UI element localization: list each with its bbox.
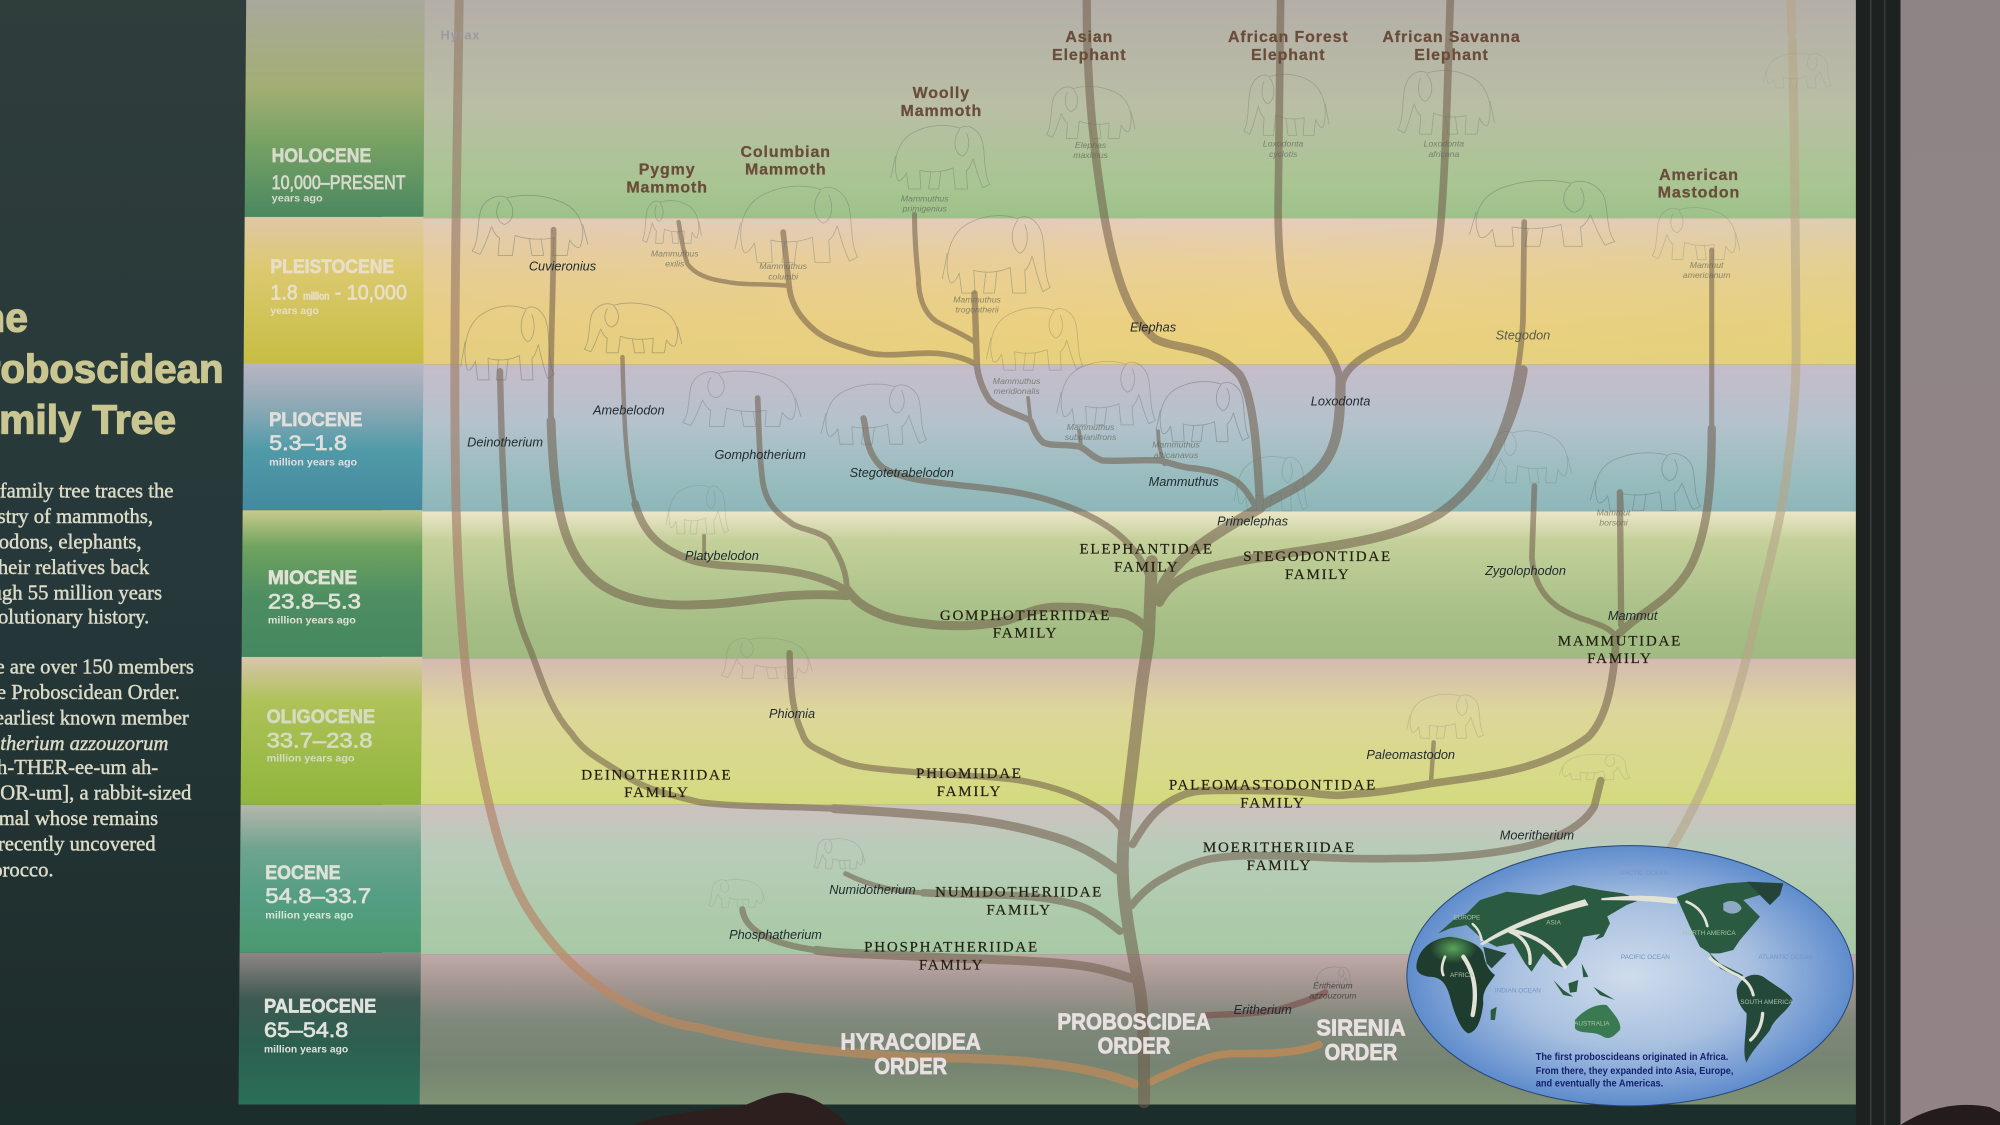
common name labels: Elephant <box>1414 47 1489 64</box>
Phiomiidae branch <box>790 653 1122 830</box>
family labels: FAMILY <box>919 957 984 973</box>
species labels: Loxodonta <box>1424 139 1464 149</box>
map place labels: ATLANTIC OCEAN <box>1758 954 1813 961</box>
genus labels: Amebelodon <box>592 403 665 418</box>
family labels: STEGODONTIDAE <box>1243 549 1392 565</box>
genus labels: Cuvieronius <box>529 258 597 273</box>
genus labels: Gomphotherium <box>714 447 806 462</box>
title <box>0 295 223 443</box>
species labels: cyclotis <box>1269 149 1298 159</box>
species labels: Mammuthus <box>759 261 807 271</box>
family labels: PALEOMASTODONTIDAE <box>1169 778 1377 794</box>
order labels <box>841 1008 1406 1079</box>
Moeritheriidae branch <box>1131 781 1601 906</box>
epoch label: Oligocene <box>267 707 375 764</box>
genus labels: Mammuthus <box>1149 474 1219 489</box>
species labels: Loxodonta <box>1263 139 1303 149</box>
map place labels: INDIAN OCEAN <box>1495 987 1541 994</box>
family labels: NUMIDOTHERIIDAE <box>935 885 1103 901</box>
epoch label: Miocene: MIOCENE <box>268 568 357 589</box>
Eritherium branch <box>1207 992 1325 1015</box>
species labels: Mammut <box>1690 260 1723 270</box>
species labels: exilis <box>665 259 685 269</box>
Amebelodon branch thick part <box>635 504 844 589</box>
genus labels: Paleomastodon <box>1366 747 1455 762</box>
order labels: ORDER <box>1325 1039 1398 1065</box>
species labels: americanum <box>1683 270 1730 280</box>
species labels: Mammuthus <box>953 294 1001 304</box>
epoch label: Oligocene: million years ago <box>267 753 355 764</box>
American Mastodon branch thick part <box>1617 429 1712 635</box>
species labels: Mammuthus <box>1152 440 1200 450</box>
map place labels: AFRICA <box>1450 972 1474 979</box>
epoch label: Eocene: EOCENE <box>265 863 341 884</box>
genus labels: Deinotherium <box>467 434 543 449</box>
map place labels: EUROPE <box>1453 915 1480 922</box>
species labels: africanavus <box>1154 450 1199 460</box>
wall behind the display <box>1888 0 2000 1125</box>
family labels: FAMILY <box>1247 858 1312 874</box>
common name labels: Elephant <box>1052 47 1127 64</box>
map caption: and eventually the Americas. <box>1536 1079 1663 1090</box>
Woolly Mammoth branch <box>915 214 974 342</box>
epoch label: Pleistocene: PLEISTOCENE <box>270 257 394 278</box>
Phosphatheriidae branch <box>742 909 1131 978</box>
Elephas: Asian Elephant <box>1087 0 1260 508</box>
trunk <box>1123 561 1152 1102</box>
common name labels: Elephant <box>1251 47 1325 64</box>
migration arrows <box>1442 896 1763 1040</box>
Phosphatheriidae branch thick part <box>816 950 1131 978</box>
outer order branches: Hyracoidea and Sirenia lines <box>455 0 1796 1084</box>
epoch label: Miocene: million years ago <box>268 616 356 627</box>
family labels: DEINOTHERIIDAE <box>581 767 732 783</box>
common name labels: Sea Cow <box>1764 29 1826 44</box>
species labels: Mammuthus <box>651 248 699 258</box>
Gomphotherium branch <box>758 398 847 596</box>
foreground rock silhouette <box>631 1093 848 1125</box>
epoch label: Pliocene <box>269 410 362 469</box>
genus labels: Elephas <box>1130 320 1177 335</box>
common name labels: American <box>1659 167 1739 184</box>
intro text block <box>0 480 194 881</box>
epoch label: Pliocene: PLIOCENE <box>269 410 362 431</box>
map place labels <box>1450 870 1813 1028</box>
M. meridionalis branch <box>1028 398 1031 421</box>
common name labels: Mammoth <box>901 103 982 120</box>
Cuvieronius branch <box>551 230 847 605</box>
continents <box>1416 882 1793 1063</box>
epoch label: Pleistocene <box>270 257 407 317</box>
geologic epoch column <box>230 0 425 1105</box>
species labels: Mammuthus <box>993 376 1040 386</box>
family labels: FAMILY <box>937 784 1002 800</box>
Numidotheriidae branch <box>846 874 1120 931</box>
Elephantidae to Primelephas <box>1157 508 1260 599</box>
common name labels: Asian <box>1065 29 1113 46</box>
genus labels: Numidotherium <box>829 882 916 897</box>
family labels: FAMILY <box>1587 651 1653 667</box>
species labels: Mammuthus <box>1067 422 1114 432</box>
genus labels: Stegodon <box>1496 327 1550 342</box>
display frame <box>1856 0 1901 1125</box>
genus labels: Mammut <box>1608 608 1658 623</box>
bottom dark strip <box>0 1105 1888 1125</box>
common name labels: African Savanna <box>1382 29 1521 46</box>
Mammuthus <box>974 293 1256 508</box>
genus labels: Zygolophodon <box>1484 563 1566 578</box>
species labels: borsoni <box>1599 518 1629 528</box>
Stegotetrabelodon branch <box>864 418 1154 599</box>
epoch label: Paleocene: PALEOCENE <box>264 997 376 1018</box>
species labels: trogontherii <box>955 304 1000 314</box>
map caption <box>1536 1052 1734 1090</box>
world map showing proboscidean migration <box>1407 846 1853 1106</box>
Zygolophodon branch <box>1532 486 1617 638</box>
species labels <box>651 139 1730 1001</box>
family labels: ELEPHANTIDAE <box>1080 542 1214 558</box>
Pygmy Mammoth branch <box>679 222 787 286</box>
M. subplanifrons branch <box>1079 431 1082 449</box>
common name labels <box>440 28 1826 202</box>
family labels: MOERITHERIIDAE <box>1203 840 1356 856</box>
African Forest Elephant <box>1278 0 1341 383</box>
genus labels: Phosphatherium <box>729 927 822 942</box>
Deinotheriidae branch <box>500 371 1117 870</box>
epoch label: Holocene: 10,000–PRESENT <box>272 173 406 194</box>
map place labels: PACIFIC OCEAN <box>1621 954 1670 961</box>
Deinotheriidae branch thick part <box>834 809 1117 870</box>
species labels: africana <box>1428 149 1459 159</box>
species labels: Eritherium <box>1313 981 1353 991</box>
genus labels: Loxodonta <box>1311 394 1370 409</box>
genus labels <box>467 258 1658 1017</box>
species labels: Mammuthus <box>901 194 949 204</box>
map caption: From there, they expanded into Asia, Europe, <box>1536 1066 1734 1077</box>
common name labels: Mammoth <box>745 162 826 179</box>
family labels: FAMILY <box>1285 567 1350 583</box>
family labels: FAMILY <box>993 626 1058 642</box>
species labels: Mammut <box>1597 507 1630 517</box>
epoch label: Eocene: million years ago <box>265 910 353 921</box>
genus labels: Moeritherium <box>1500 827 1575 842</box>
order labels: ORDER <box>1098 1033 1171 1059</box>
species labels: columbi <box>768 271 799 281</box>
epoch label: Holocene: HOLOCENE <box>272 146 371 167</box>
epoch label: Eocene <box>265 863 371 921</box>
genus labels: Stegotetrabelodon <box>850 465 954 480</box>
epoch label: Holocene <box>272 146 406 205</box>
map place labels: ASIA <box>1546 920 1562 927</box>
Loxodonta <box>1258 379 1341 508</box>
map place labels: AUSTRALIA <box>1574 1021 1610 1028</box>
epoch label: Paleocene: million years ago <box>264 1044 348 1055</box>
African origin glow <box>1430 933 1477 963</box>
dark text panel <box>0 0 246 1125</box>
epoch label: Pliocene: million years ago <box>269 458 357 469</box>
epoch label: Paleocene: 65–54.8 <box>264 1017 348 1042</box>
order labels: ORDER <box>874 1053 947 1079</box>
species labels: Elephas <box>1075 140 1106 150</box>
Columbian Mammoth branch <box>783 232 974 364</box>
Paleomastodontidae and Mammutidae branch <box>1133 638 1616 844</box>
Mammut branch <box>1620 492 1621 625</box>
epoch label: Oligocene: 33.7–23.8 <box>267 727 372 752</box>
order labels: HYRACOIDEA <box>841 1029 981 1055</box>
common name labels: Woolly <box>913 85 970 102</box>
common name labels: Pygmy <box>639 162 695 179</box>
epoch label: Pleistocene: years ago <box>270 306 319 317</box>
Paleomastodon branch <box>1431 742 1434 781</box>
epoch label: Miocene: 23.8–5.3 <box>268 588 361 613</box>
genus labels: Phiomia <box>769 706 815 721</box>
animal outline drawings <box>461 53 1831 988</box>
common name labels: Hyrax <box>440 28 480 43</box>
species labels: primigenius <box>902 204 948 214</box>
American Mastodon branch <box>1617 250 1712 635</box>
order labels: PROBOSCIDEA <box>1057 1008 1210 1034</box>
family labels <box>581 542 1682 973</box>
family labels: FAMILY <box>1240 795 1306 811</box>
foreground dark shape at right <box>1901 1105 2000 1125</box>
Platybelodon branch <box>703 536 706 562</box>
common name labels: African Forest <box>1228 29 1349 46</box>
family labels: FAMILY <box>624 785 690 801</box>
Stegodontidae and Stegodon branch <box>1159 222 1524 602</box>
epoch label: Pliocene: 5.3–1.8 <box>269 430 347 455</box>
Numidotheriidae branch thick part <box>923 893 1120 931</box>
chart background bands <box>383 0 1857 1105</box>
genus labels: Eritherium <box>1234 1002 1292 1017</box>
map caption: The first proboscideans originated in Africa. <box>1536 1052 1728 1063</box>
family labels: FAMILY <box>1114 559 1179 575</box>
Stegodon branch thick part <box>1159 370 1523 602</box>
genus labels: Primelephas <box>1217 514 1289 529</box>
family labels: MAMMUTIDAE <box>1558 633 1682 649</box>
genus labels: Platybelodon <box>685 548 759 563</box>
epoch label: Holocene: years ago <box>272 194 323 205</box>
family labels: FAMILY <box>986 903 1052 919</box>
common name labels: Columbian <box>741 144 831 161</box>
Amebelodon branch <box>622 357 844 589</box>
family labels: PHOSPHATHERIIDAE <box>864 940 1039 956</box>
common name labels: Mastodon <box>1658 185 1740 202</box>
order labels: SIRENIA <box>1316 1015 1406 1041</box>
Cuvieronius branch thick part <box>551 421 847 605</box>
M. africanavus branch <box>1158 431 1165 464</box>
map place labels: SOUTH AMERICA <box>1740 999 1794 1006</box>
species labels: meridionalis <box>993 386 1040 396</box>
epoch label: Pleistocene: 1.8 million - 10,000 <box>270 280 407 305</box>
species labels: subplanifrons <box>1065 432 1117 442</box>
map place labels: NORTH AMERICA <box>1683 930 1736 937</box>
common name labels: Mammoth <box>626 180 708 197</box>
family labels: PHIOMIIDAE <box>916 766 1023 782</box>
family labels: GOMPHOTHERIIDAE <box>940 608 1111 624</box>
evolutionary tree branches <box>500 0 1712 1102</box>
epoch label: Miocene <box>268 568 361 627</box>
Gomphotheriidae branch <box>847 589 1149 631</box>
species labels: azzouzorum <box>1309 991 1356 1001</box>
epoch label: Paleocene <box>264 997 376 1055</box>
epoch label: Eocene: 54.8–33.7 <box>265 883 371 908</box>
map place labels: ARCTIC OCEAN <box>1620 870 1669 877</box>
species labels: maximus <box>1073 150 1109 160</box>
African Savanna Elephant <box>1342 0 1450 383</box>
epoch label: Oligocene: OLIGOCENE <box>267 707 375 728</box>
